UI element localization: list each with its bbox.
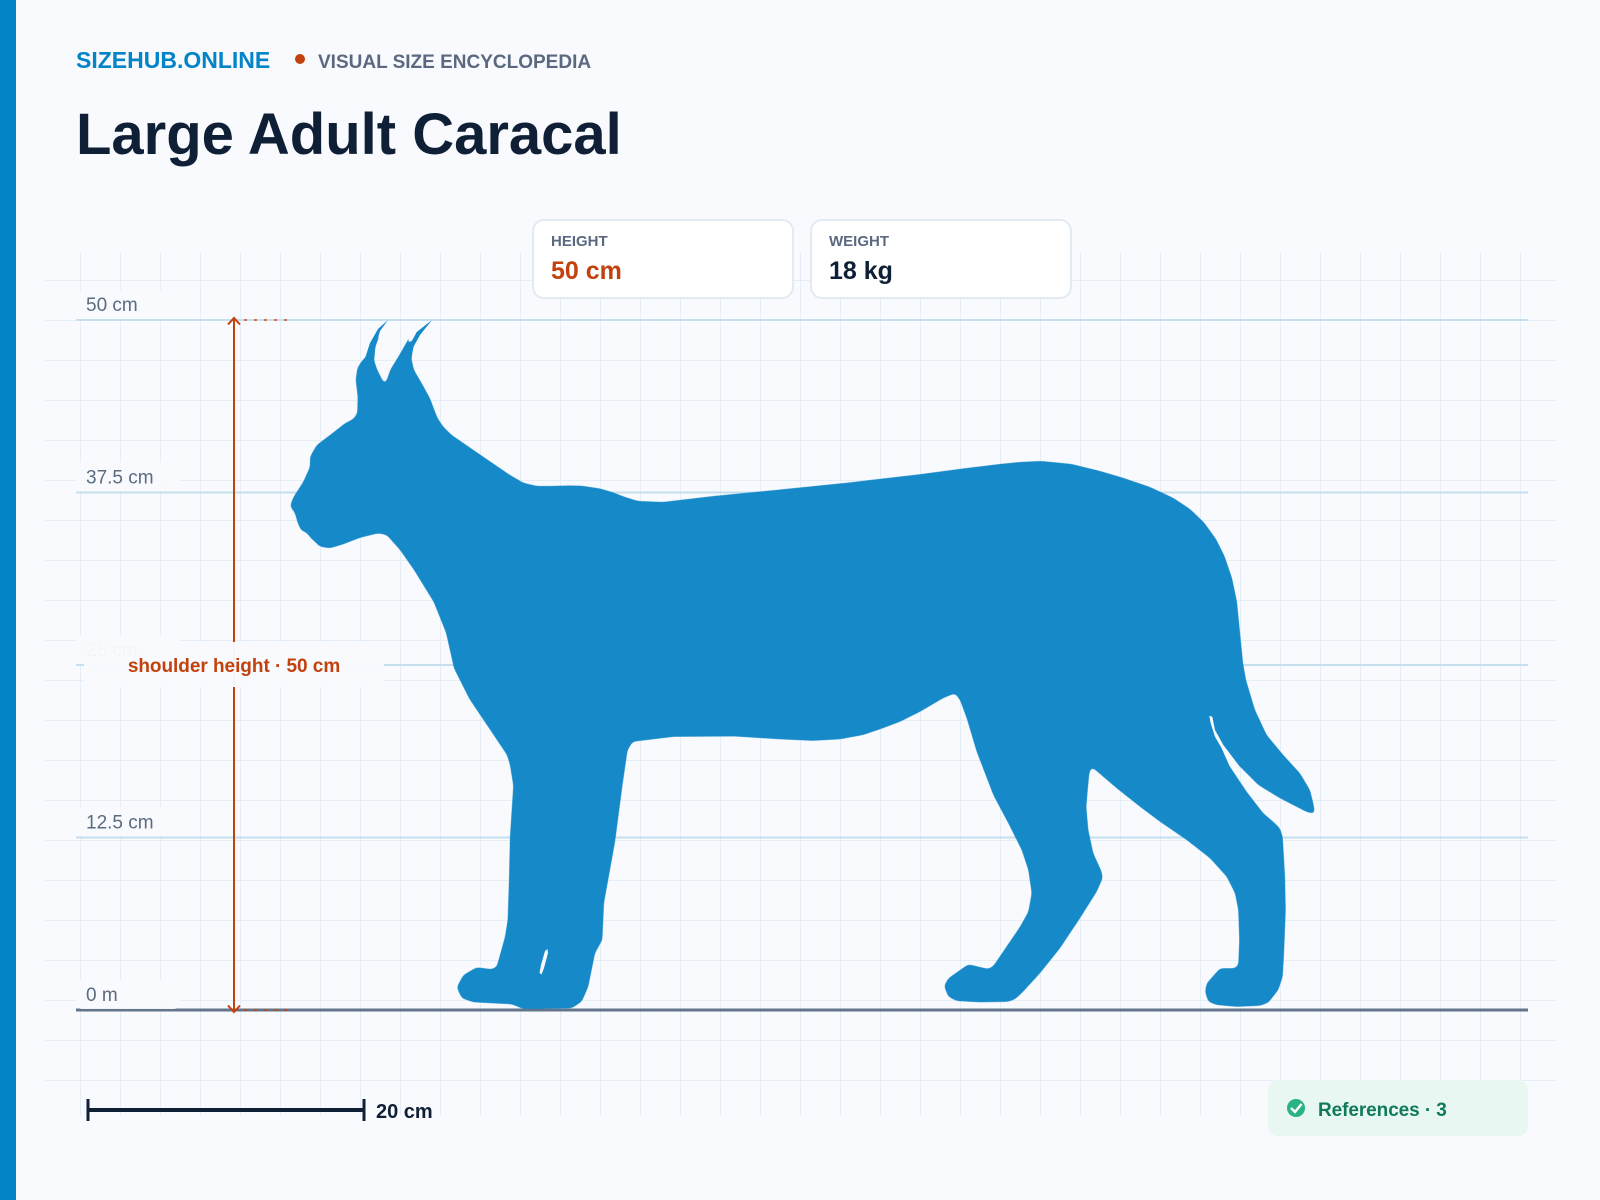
accent stripe [0,0,16,1200]
callout: shoulder height [84,642,384,687]
stat card: weight: WEIGHT [829,233,889,250]
ground line [76,1008,1528,1012]
brand header: SIZEHUB.ONLINE [76,47,270,73]
axis label: 0 m: 0 m [86,985,118,1006]
brand header [76,47,591,73]
tail slit [1209,716,1238,767]
ear tips [364,320,432,360]
stat card: height: HEIGHT [551,233,608,250]
stat card: weight [811,220,1071,298]
axis label: 25 cm: 25 cm [86,640,138,661]
axis label: 12.5 cm: 12.5 cm [86,812,154,834]
brand header: VISUAL SIZE ENCYCLOPEDIA [318,52,591,73]
stat card: weight: 18 kg [829,257,893,285]
references badge: References · 3 [1318,1100,1447,1121]
axis label: 37.5 cm: 37.5 cm [86,468,154,488]
axis label: 12.5 cm [76,808,180,836]
axis label: 50 cm [76,290,180,319]
height guide lines [76,320,1528,838]
paw slit [540,949,548,974]
axis label: 37.5 cm [76,462,180,492]
axis label: 0 m [76,980,180,1009]
height arrow [228,318,288,1012]
scale bar: 20 cm [376,1101,433,1123]
references badge [1268,1080,1528,1136]
axis label: 25 cm [76,635,180,664]
callout: shoulder height: shoulder height · 50 cm [128,656,340,677]
silhouette: caracal [290,320,1315,1009]
icon: check circle [1287,1099,1305,1117]
axis label: 50 cm: 50 cm [86,295,138,316]
stat card: height: 50 cm [551,257,622,285]
stat card: height [533,220,793,298]
title: Large Adult Caracal [76,102,622,167]
